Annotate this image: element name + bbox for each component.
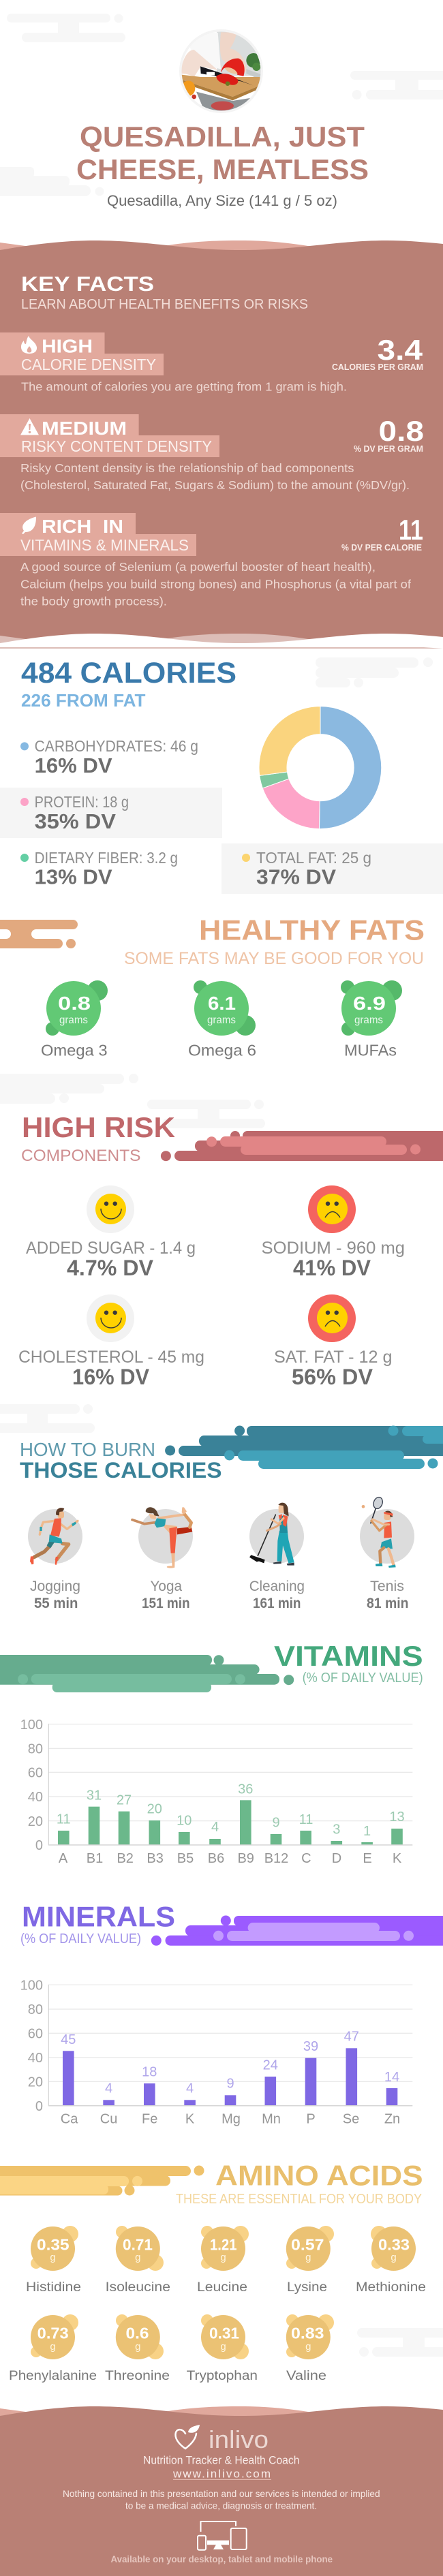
risk: added sugar — [26, 1185, 196, 1280]
panel: minerals — [20, 1901, 443, 2127]
amino: threonine: Threonine — [105, 2369, 170, 2383]
fact: rich in vitamins and minerals: A good source of Selenium (a powerful booster of heart health), — [20, 560, 376, 574]
amino: tryptophan — [187, 2314, 258, 2383]
bar chart: vitamins: 80 — [28, 1741, 43, 1756]
fat: omega 6: 6.1 — [208, 993, 236, 1014]
amino: histidine: g — [50, 2252, 56, 2263]
amino: valine: 0.83 — [291, 2325, 324, 2342]
icon: leaf — [22, 516, 36, 534]
calories from fat: 226 FROM FAT — [21, 690, 146, 711]
bar chart: vitamins: 11 — [57, 1812, 71, 1827]
fat: omega 3: 0.8 — [58, 993, 91, 1014]
macro: dietary fiber: DIETARY FIBER: 3.2 g — [35, 849, 178, 867]
bar chart: vitamins: 0 — [35, 1838, 43, 1853]
bar chart: vitamins: 1 — [363, 1824, 371, 1839]
fact: rich in vitamins and minerals: 11 — [399, 514, 423, 546]
bar chart: minerals: Mg — [222, 2112, 241, 2127]
amino: methionine: Methionine — [356, 2280, 426, 2295]
panel: calories — [0, 657, 443, 894]
fact: medium risky content density: % DV PER GRAM — [354, 444, 423, 454]
macro: carbohydrates: 16% DV — [35, 754, 112, 777]
bar chart: vitamins: B5 — [177, 1851, 194, 1866]
fat: omega 6: Omega 6 — [188, 1041, 256, 1059]
availability note: Available on your desktop, tablet and mobile phone — [110, 2554, 333, 2564]
bar chart: minerals: Ca — [61, 2112, 78, 2127]
panel: key facts — [0, 240, 443, 649]
risk: saturated fat — [274, 1294, 393, 1389]
amino: valine: Valine — [286, 2369, 326, 2383]
key facts subheading: LEARN ABOUT HEALTH BENEFITS OR RISKS — [21, 296, 308, 312]
activity: cleaning: 161 min — [253, 1596, 301, 1611]
bar chart: minerals: Se — [343, 2112, 359, 2127]
bar chart: minerals: 45 — [61, 2032, 76, 2047]
panel: healthy fats — [0, 914, 425, 1059]
fat: omega 6 — [188, 980, 256, 1059]
amino: lysine: g — [305, 2252, 311, 2263]
bar chart: vitamins: 10 — [177, 1814, 192, 1829]
bar chart: minerals: Fe — [142, 2112, 157, 2127]
fat: mufas: MUFAs — [344, 1041, 397, 1059]
amino: leucine — [197, 2226, 249, 2295]
website link: www.inlivo.com — [172, 2467, 271, 2480]
bar chart: vitamins: 27 — [117, 1793, 132, 1808]
title — [76, 121, 369, 185]
amino: threonine — [105, 2314, 170, 2383]
amino acids heading: AMINO ACIDS — [215, 2160, 423, 2192]
banner: high risk — [161, 1131, 443, 1161]
fact: rich in vitamins and minerals: % DV PER CALORIE — [341, 542, 422, 553]
fat: omega 6: grams — [207, 1014, 236, 1026]
fact: high calorie density: CALORIES PER GRAM — [332, 362, 423, 372]
amino: leucine: g — [220, 2252, 226, 2263]
bar chart: minerals: Mn — [262, 2112, 281, 2127]
amino: leucine: 1.21 — [210, 2236, 237, 2254]
fat: omega 3 — [41, 980, 108, 1059]
amino: lysine: 0.57 — [291, 2236, 324, 2254]
icon: flame — [21, 336, 37, 354]
burn heading line 2: THOSE CALORIES — [20, 1458, 222, 1483]
bar chart: vitamins: 13 — [389, 1810, 405, 1825]
fact: high calorie density: The amount of calories you are getting from 1 gram is high. — [21, 380, 347, 394]
bar chart: minerals: 4 — [186, 2081, 194, 2096]
calories heading: 484 CALORIES — [21, 657, 236, 689]
amino: methionine: 0.33 — [378, 2236, 410, 2254]
vitamins subheading: (% OF DAILY VALUE) — [303, 1671, 423, 1686]
bar chart: minerals: Zn — [384, 2112, 400, 2127]
macro: carbohydrates: CARBOHYDRATES: 46 g — [35, 737, 198, 755]
bar chart: minerals: Cu — [100, 2112, 117, 2127]
bar chart: vitamins: B12 — [264, 1851, 288, 1866]
activity: tennis — [360, 1496, 414, 1611]
bar chart: vitamins: 60 — [28, 1766, 43, 1781]
burn heading line 1: HOW TO BURN — [20, 1439, 155, 1460]
bar chart: vitamins: 20 — [147, 1802, 162, 1817]
panel: amino acids — [0, 2160, 426, 2383]
panel: high risk components — [18, 1111, 443, 1389]
bar chart: vitamins: 4 — [211, 1820, 219, 1835]
amino: methionine — [356, 2226, 426, 2295]
bar chart: minerals: 9 — [226, 2077, 234, 2092]
amino: methionine: g — [391, 2252, 397, 2263]
amino: phenylalanine: Phenylalanine — [9, 2369, 97, 2383]
title: QUESADILLA, JUST — [80, 121, 365, 153]
bar chart: vitamins: A — [59, 1851, 68, 1866]
activity: jogging: Jogging — [30, 1579, 80, 1594]
minerals subheading: (% OF DAILY VALUE) — [20, 1931, 141, 1946]
activity: yoga: Yoga — [150, 1579, 182, 1594]
fact: medium risky content density: MEDIUM — [42, 418, 127, 439]
fact: medium risky content density: 0.8 — [379, 415, 424, 447]
serving size subtitle: Quesadilla, Any Size (141 g / 5 oz) — [107, 192, 337, 209]
icon: devices — [198, 2521, 247, 2550]
risk: cholesterol — [18, 1294, 204, 1389]
bar chart: minerals: 40 — [28, 2051, 43, 2066]
bar chart: minerals: 18 — [142, 2065, 157, 2080]
risk: added sugar: ADDED SUGAR - 1.4 g — [26, 1239, 196, 1258]
macro: total fat — [242, 849, 371, 888]
amino: threonine: g — [135, 2341, 140, 2353]
fact: rich in vitamins and minerals: VITAMINS & MINERALS — [20, 536, 189, 554]
bar chart: vitamins: B2 — [117, 1851, 134, 1866]
amino: histidine: 0.35 — [37, 2236, 70, 2254]
activity: jogging: 55 min — [34, 1596, 78, 1611]
bar chart: vitamins: 11 — [299, 1812, 313, 1827]
fact: high calorie density — [0, 332, 423, 394]
risk: cholesterol: 16% DV — [72, 1365, 150, 1389]
bar chart: minerals: 0 — [35, 2099, 43, 2114]
bar chart: minerals: 24 — [263, 2058, 278, 2073]
brand name: inlivo — [209, 2425, 269, 2453]
bar chart: vitamins: E — [363, 1851, 372, 1866]
bar chart: vitamins: B3 — [147, 1851, 164, 1866]
high risk heading: HIGH RISK — [22, 1111, 175, 1143]
fact: high calorie density: 3.4 — [378, 334, 423, 366]
fat: omega 3: grams — [59, 1014, 88, 1026]
fat: mufas: grams — [354, 1014, 383, 1026]
banner: healthy fats — [0, 920, 79, 948]
activity: tennis: 81 min — [367, 1596, 409, 1611]
title: CHEESE, MEATLESS — [76, 153, 369, 185]
fact: rich in vitamins and minerals: Calcium (helps you build strong bones) and Phosphorus (a vital part of — [20, 578, 411, 591]
macro: total fat: TOTAL FAT: 25 g — [256, 849, 371, 867]
footer — [0, 2406, 443, 2576]
risk: saturated fat: 56% DV — [292, 1365, 373, 1389]
fat: mufas: 6.9 — [353, 993, 386, 1014]
activity: cleaning: Cleaning — [249, 1579, 305, 1594]
bar chart: vitamins: 40 — [28, 1790, 43, 1805]
amino: phenylalanine: g — [50, 2341, 56, 2353]
bar chart: vitamins: B9 — [237, 1851, 254, 1866]
bar chart: vitamins: 3 — [333, 1822, 340, 1837]
amino: isoleucine: g — [135, 2252, 140, 2263]
risk: saturated fat: SAT. FAT - 12 g — [274, 1348, 393, 1367]
fat: omega 3: Omega 3 — [41, 1041, 108, 1059]
panel: vitamins — [0, 1640, 423, 1866]
amino: tryptophan: g — [220, 2341, 226, 2353]
bar chart: minerals: 60 — [28, 2026, 43, 2041]
macro: protein: PROTEIN: 18 g — [35, 793, 129, 811]
risk: cholesterol: CHOLESTEROL - 45 mg — [18, 1348, 204, 1367]
amino: phenylalanine: 0.73 — [37, 2325, 69, 2342]
macro: protein — [20, 793, 129, 833]
bar chart: minerals: 47 — [344, 2029, 359, 2044]
bar chart: minerals: 14 — [384, 2070, 399, 2085]
banner: vitamins — [0, 1655, 294, 1692]
icon: warning triangle — [20, 418, 39, 435]
bar chart: vitamins: 9 — [272, 1816, 280, 1831]
fact: rich in vitamins and minerals — [0, 513, 423, 608]
activity: tennis: Tenis — [370, 1579, 404, 1594]
bar chart: minerals: 80 — [28, 2002, 43, 2017]
donut chart — [259, 707, 382, 829]
risk: sodium: 41% DV — [293, 1256, 371, 1280]
macro: dietary fiber: 13% DV — [35, 865, 112, 888]
bar chart: minerals: P — [306, 2112, 316, 2127]
fact: high calorie density: CALORIE DENSITY — [21, 356, 156, 373]
amino: histidine: Histidine — [26, 2280, 81, 2295]
amino: valine — [286, 2314, 334, 2383]
amino: phenylalanine — [9, 2314, 97, 2383]
bar chart: minerals: 39 — [303, 2039, 318, 2054]
bar chart: minerals: 20 — [28, 2075, 43, 2090]
amino: histidine — [26, 2226, 81, 2295]
risk: added sugar: 4.7% DV — [67, 1256, 154, 1280]
bar chart: minerals — [20, 1978, 412, 2127]
amino: isoleucine — [106, 2226, 170, 2295]
fact: medium risky content density: RISKY CONTENT DENSITY — [21, 437, 212, 455]
fact: medium risky content density: (Cholesterol, Saturated Fat, Sugars & Sodium) to the amount (%DV/gr). — [20, 478, 410, 492]
panel: how to burn calories — [20, 1425, 443, 1611]
amino: tryptophan: Tryptophan — [187, 2369, 258, 2383]
risk: sodium — [262, 1185, 405, 1280]
fact: high calorie density: HIGH — [42, 335, 93, 357]
minerals heading: MINERALS — [22, 1901, 175, 1933]
amino: isoleucine: 0.71 — [123, 2236, 153, 2254]
amino: threonine: 0.6 — [125, 2325, 149, 2342]
bar chart: vitamins: B1 — [87, 1851, 103, 1866]
disclaimer: to be a medical advice, diagnosis or treatment. — [125, 2500, 317, 2511]
fact: medium risky content density: Risky Content density is the relationship of bad components — [20, 461, 354, 475]
bar chart: vitamins: C — [301, 1851, 311, 1866]
bar chart: minerals: K — [185, 2112, 195, 2127]
bar chart: vitamins: 31 — [87, 1788, 102, 1803]
banner: burn — [165, 1425, 443, 1469]
key facts heading: KEY FACTS — [21, 272, 154, 296]
amino: leucine: Leucine — [197, 2280, 247, 2295]
macro: carbohydrates — [20, 737, 198, 777]
fat: mufas — [341, 980, 402, 1059]
activity: yoga: 151 min — [142, 1596, 190, 1611]
risk: sodium: SODIUM - 960 mg — [262, 1239, 405, 1258]
activity: cleaning — [249, 1503, 305, 1611]
tagline: Nutrition Tracker & Health Coach — [143, 2454, 300, 2467]
high risk subheading: COMPONENTS — [21, 1147, 140, 1165]
icon: inlivo heart logo — [175, 2425, 200, 2449]
bar chart: vitamins: 100 — [20, 1718, 43, 1733]
fact: rich in vitamins and minerals: the body growth process). — [20, 594, 167, 608]
disclaimer — [63, 2488, 380, 2511]
macro: dietary fiber — [20, 849, 178, 888]
amino: lysine: Lysine — [287, 2280, 327, 2295]
healthy fats subheading: SOME FATS MAY BE GOOD FOR YOU — [124, 949, 424, 968]
food photo — [179, 29, 263, 113]
amino: lysine — [286, 2226, 334, 2295]
bar chart: vitamins — [20, 1718, 412, 1866]
bar chart: vitamins: K — [393, 1851, 402, 1866]
amino: valine: g — [305, 2341, 311, 2353]
bar chart: minerals: 100 — [20, 1978, 43, 1993]
activity: yoga — [132, 1507, 193, 1611]
macro: total fat: 37% DV — [256, 865, 336, 888]
bar chart: vitamins: 20 — [28, 1814, 43, 1829]
bar chart: vitamins: B6 — [208, 1851, 224, 1866]
bar chart: vitamins: D — [332, 1851, 341, 1866]
banner: amino acids — [0, 2165, 204, 2195]
banner: minerals — [151, 1916, 443, 1946]
activity: jogging — [28, 1508, 82, 1611]
vitamins heading: VITAMINS — [274, 1640, 423, 1672]
bar chart: minerals: 4 — [105, 2081, 112, 2096]
amino: tryptophan: 0.31 — [209, 2325, 239, 2342]
fact: rich in vitamins and minerals: RICH IN — [42, 516, 123, 537]
macro: protein: 35% DV — [35, 809, 116, 833]
healthy fats heading: HEALTHY FATS — [199, 914, 425, 946]
fact: medium risky content density — [0, 414, 424, 492]
amino: isoleucine: Isoleucine — [106, 2280, 170, 2295]
disclaimer: Nothing contained in this presentation and our services is intended or implied — [63, 2488, 380, 2499]
bar chart: vitamins: 36 — [238, 1782, 253, 1797]
